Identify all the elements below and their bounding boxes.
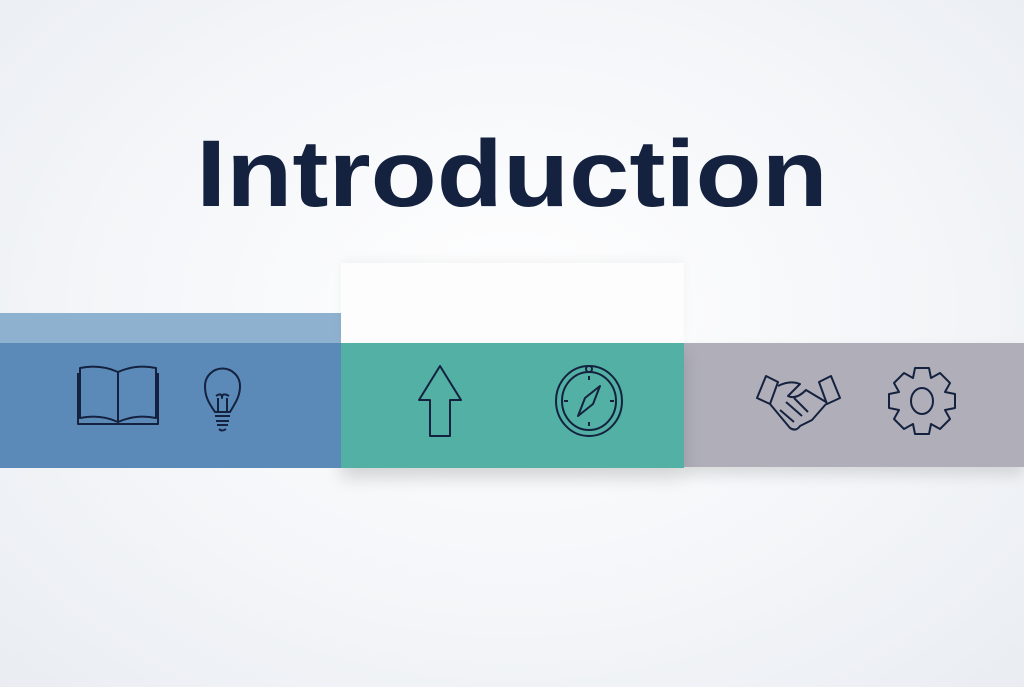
panel: blue band light top [0,313,341,343]
panel: blue band [0,343,341,468]
icon: arrow up [419,366,461,436]
icon: compass [556,366,622,436]
icon: gear [889,368,955,434]
icon: book [78,367,158,424]
icon: lightbulb [205,368,240,430]
panel: white tab [341,263,684,343]
title: Introduction [196,121,828,227]
panel: gray band [684,343,1024,467]
icon: handshake [757,376,840,430]
panel: teal band [341,343,684,468]
